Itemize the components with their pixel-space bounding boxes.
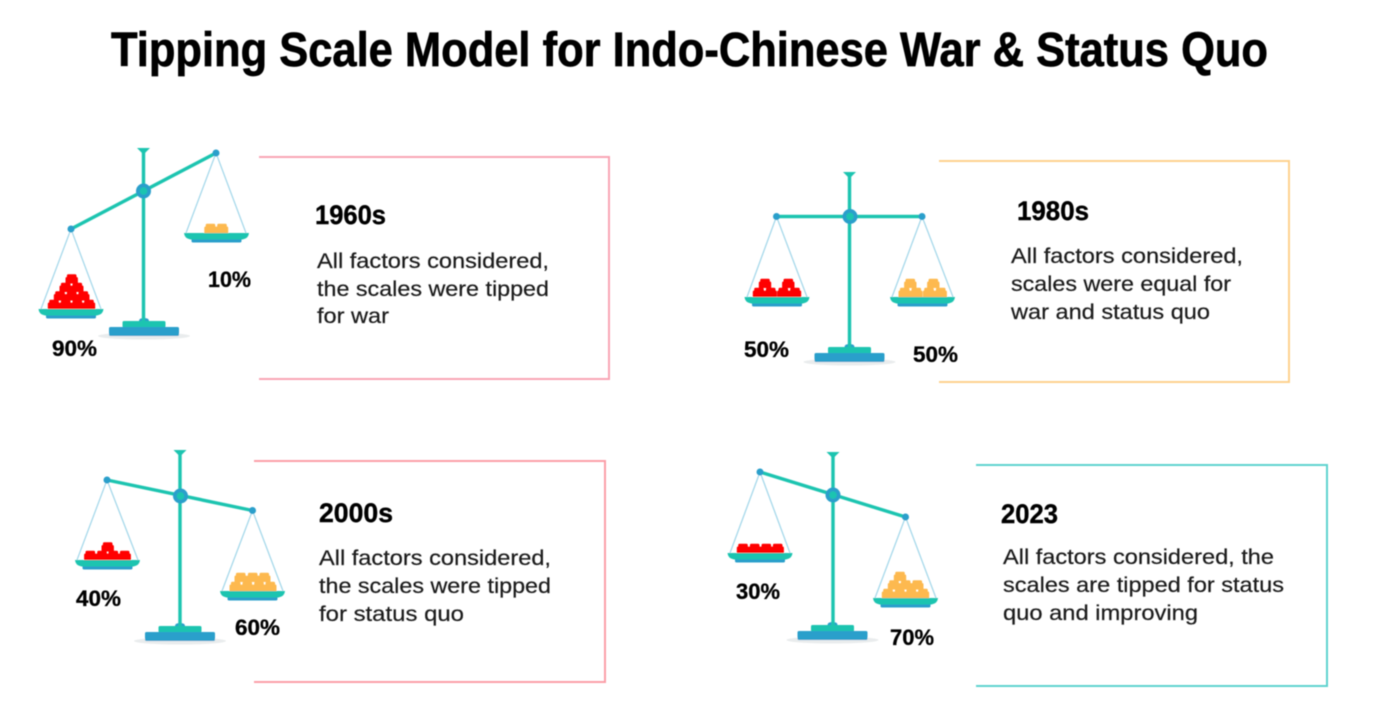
icon: tipping scale 1960s [38,148,249,340]
label: 90%: 90% [52,336,97,361]
label: 40%: 40% [76,586,121,611]
label: 50% red: 50% [744,337,789,362]
panel: 2023 [728,452,1327,686]
panel: 1960s [38,148,609,379]
text block: 1960s: for war [317,305,389,328]
text block: 2000s: All factors considered, [319,547,551,570]
label: 70%: 70% [890,625,934,650]
text block: 2000s: the scales were tipped [319,575,551,598]
text block: 2000s [319,547,551,626]
text block: 2023 [1003,546,1284,625]
panel border: 2023 [976,465,1327,686]
label: 60%: 60% [235,615,280,640]
text block: 1960s: All factors considered, [317,250,549,273]
icon: tipping scale 2000s [75,450,285,644]
heading: 2000s: 2000s [319,498,393,528]
text block: 1980s: war and status quo [1010,301,1210,324]
panel border: 1960s [259,157,609,379]
text block: 1960s [317,250,549,328]
heading: 2023: 2023 [1001,499,1058,529]
heading: 1960s: 1960s [315,200,386,230]
text block: 2023: All factors considered, the [1003,546,1274,569]
panel: 1980s [744,161,1289,382]
text block: 1980s: scales were equal for [1011,273,1231,296]
icon: tipping scale 2023 [728,452,938,644]
text block: 2000s: for status quo [319,603,464,626]
panel border: 1980s [939,161,1289,382]
text block: 2023: scales are tipped for status [1003,574,1284,597]
icon: balanced scale 1980s [744,172,955,366]
text block: 1980s [1010,245,1243,324]
label: 10%: 10% [208,267,251,292]
title: Tipping Scale Model for Indo-Chinese War & Status Quo [111,24,1268,77]
panel border: 2000s [254,461,605,682]
label: 30%: 30% [736,579,780,604]
text block: 1960s: the scales were tipped [317,278,549,301]
label: 50% gold: 50% [913,342,958,367]
heading: 1980s: 1980s [1017,196,1089,226]
text block: 1980s: All factors considered, [1011,245,1243,268]
panel: 2000s [75,450,605,682]
text block: 2023: quo and improving [1003,602,1198,625]
